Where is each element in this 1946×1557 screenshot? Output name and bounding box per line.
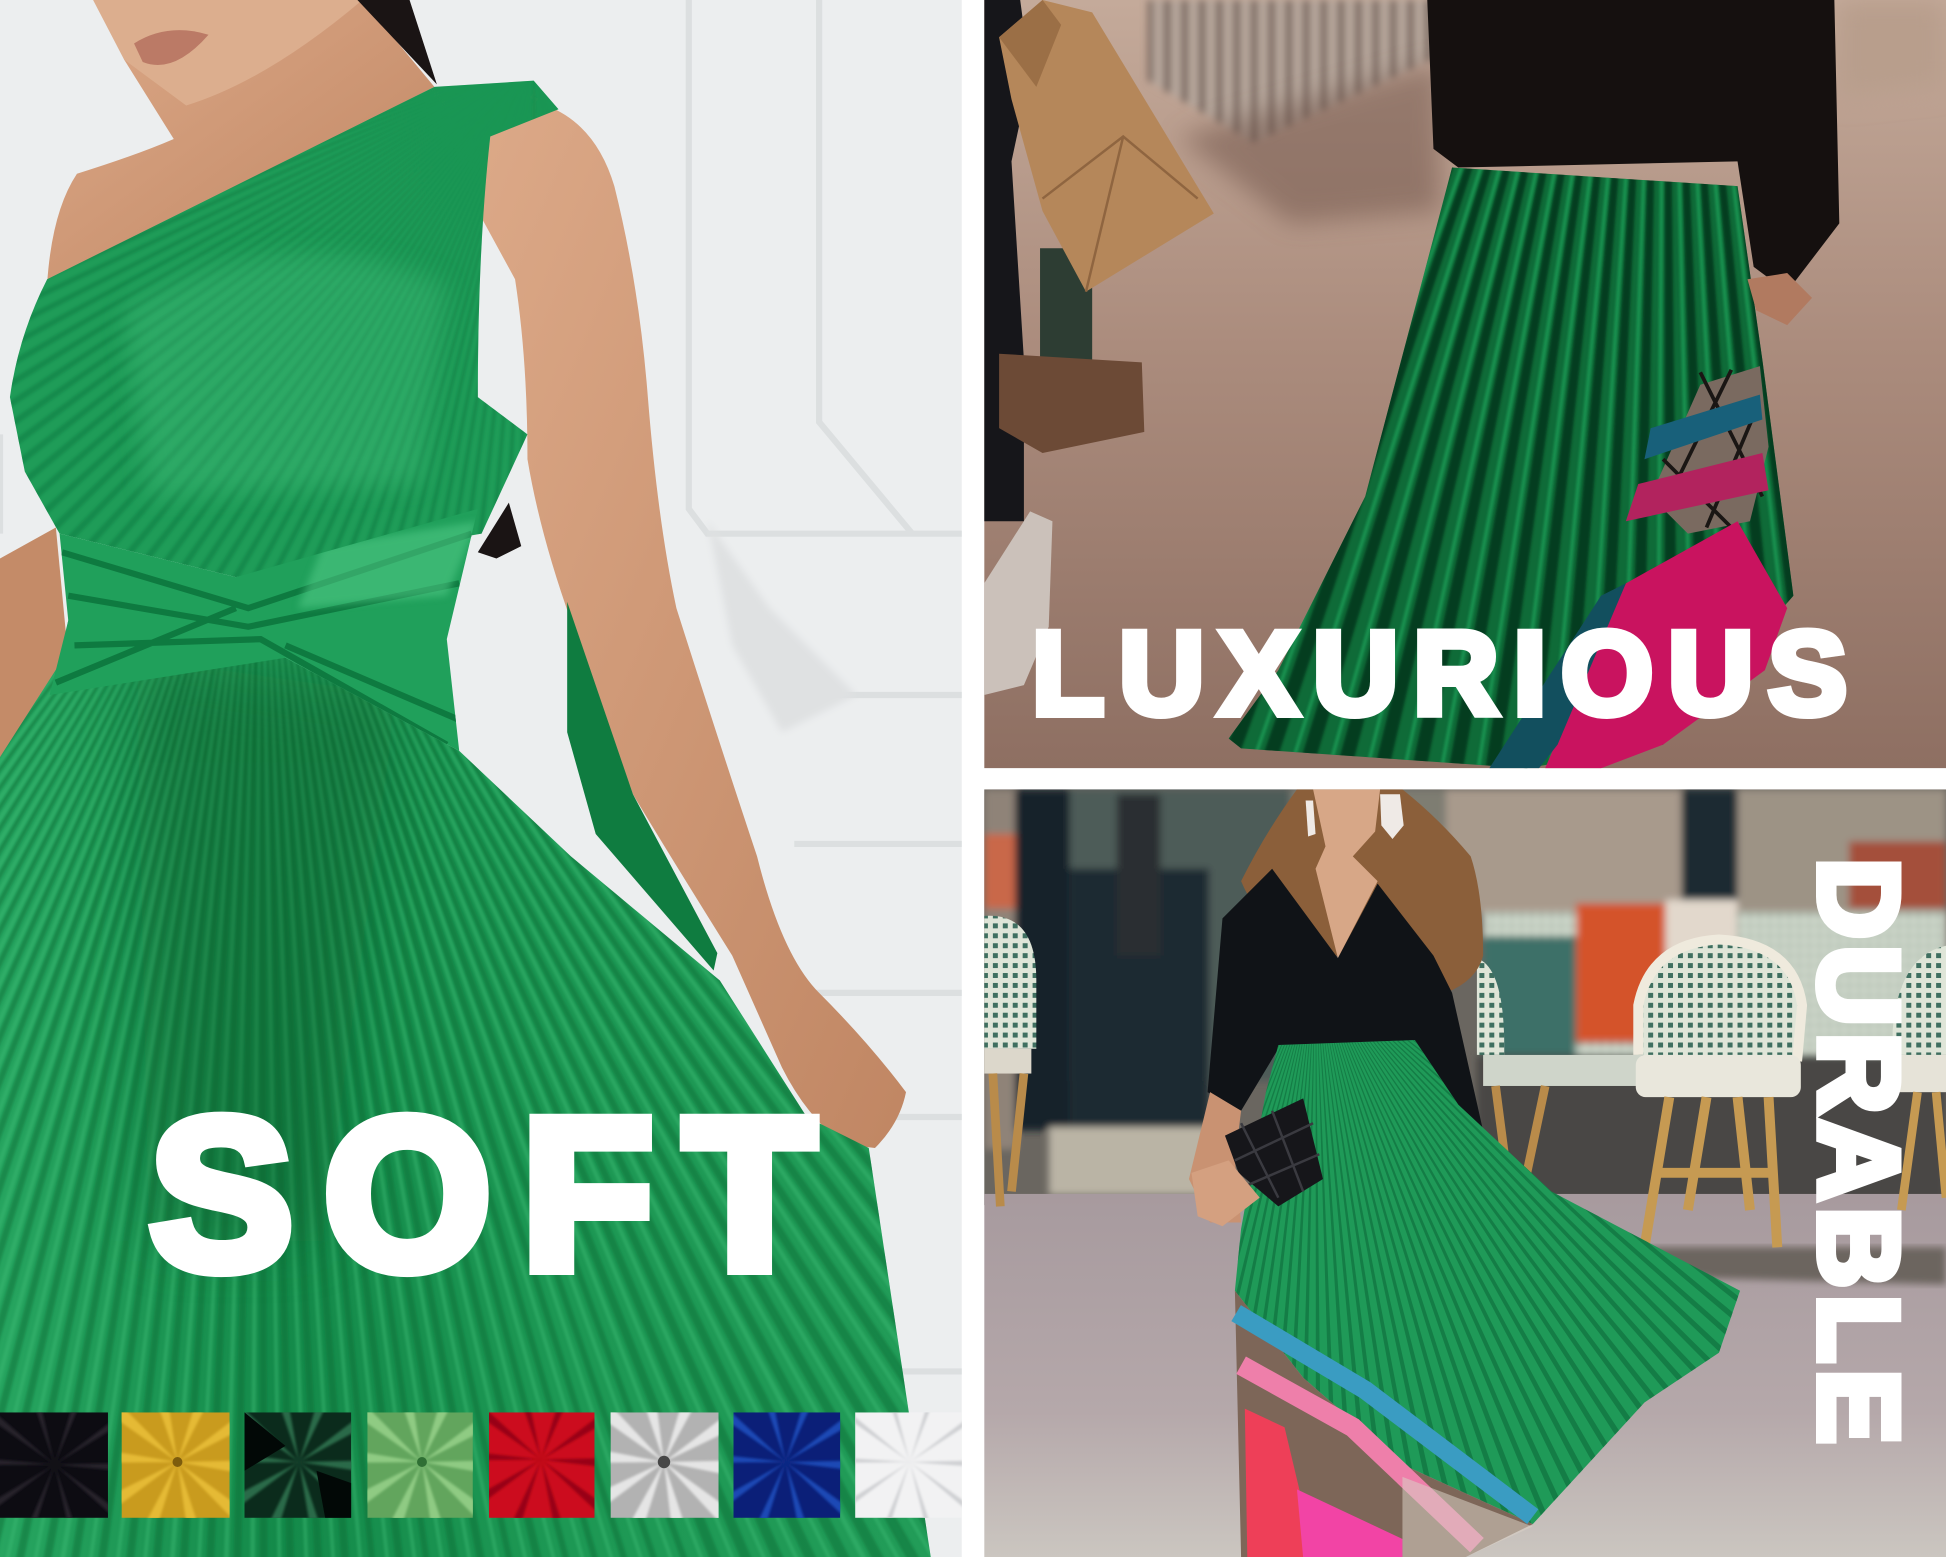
street pavement — [984, 1194, 1946, 1557]
paper bag — [999, 0, 1214, 292]
woman arm — [1189, 1092, 1241, 1222]
hand — [1747, 273, 1812, 325]
swatch: dark green — [244, 1412, 351, 1518]
bodice — [10, 80, 558, 578]
black jacket — [1427, 0, 1839, 292]
cafe background — [984, 789, 1946, 1205]
swatch: black — [0, 1412, 108, 1518]
back drape — [567, 602, 717, 971]
model face and hair — [93, 0, 437, 105]
heading: DURABLE: DURABLE — [1796, 858, 1921, 1444]
skirt — [819, 472, 1812, 1524]
small bistro table — [1477, 958, 1644, 1210]
swatch: silver — [611, 1412, 719, 1518]
dark figure on the left — [984, 0, 1030, 521]
earrings — [1306, 794, 1404, 839]
quilted black handbag — [1225, 1098, 1323, 1206]
panel: luxurious skirt photo — [921, 0, 1946, 768]
sheer multicolour hem — [1235, 1291, 1533, 1557]
swatch: royal blue — [733, 1412, 840, 1518]
swatch: gold — [122, 1412, 230, 1518]
left bistro chair — [984, 916, 1036, 1206]
model neck and shoulder — [47, 0, 434, 283]
swatch: red — [489, 1410, 594, 1518]
woman face and neck — [1313, 789, 1380, 958]
wall background — [0, 0, 962, 1557]
sneaker — [984, 511, 1052, 695]
wooden base and post — [999, 248, 1144, 453]
model right arm — [478, 105, 906, 1148]
woman hair — [1241, 789, 1483, 993]
fabric swatches — [0, 1410, 962, 1518]
waist wrap — [50, 509, 478, 751]
hand on bag — [1191, 1160, 1260, 1226]
model left arm — [0, 527, 68, 760]
skirt — [921, 0, 1946, 768]
swatch: light green — [367, 1412, 473, 1518]
panel: soft green dress photo — [0, 0, 1030, 1557]
pavement background — [984, 0, 1946, 768]
panel: durable skirt photo — [819, 472, 1946, 1557]
black blouse — [1208, 869, 1486, 1160]
hair at the back — [478, 503, 521, 558]
multicolour panel — [1489, 366, 1787, 768]
heading: SOFT: SOFT — [150, 1075, 815, 1314]
right bistro chair — [1889, 946, 1946, 1210]
swatch: white — [855, 1412, 962, 1518]
main bistro chair — [1636, 940, 1802, 1247]
skirt — [0, 620, 931, 1557]
heading: LUXURIOUS: LUXURIOUS — [1032, 608, 1847, 740]
